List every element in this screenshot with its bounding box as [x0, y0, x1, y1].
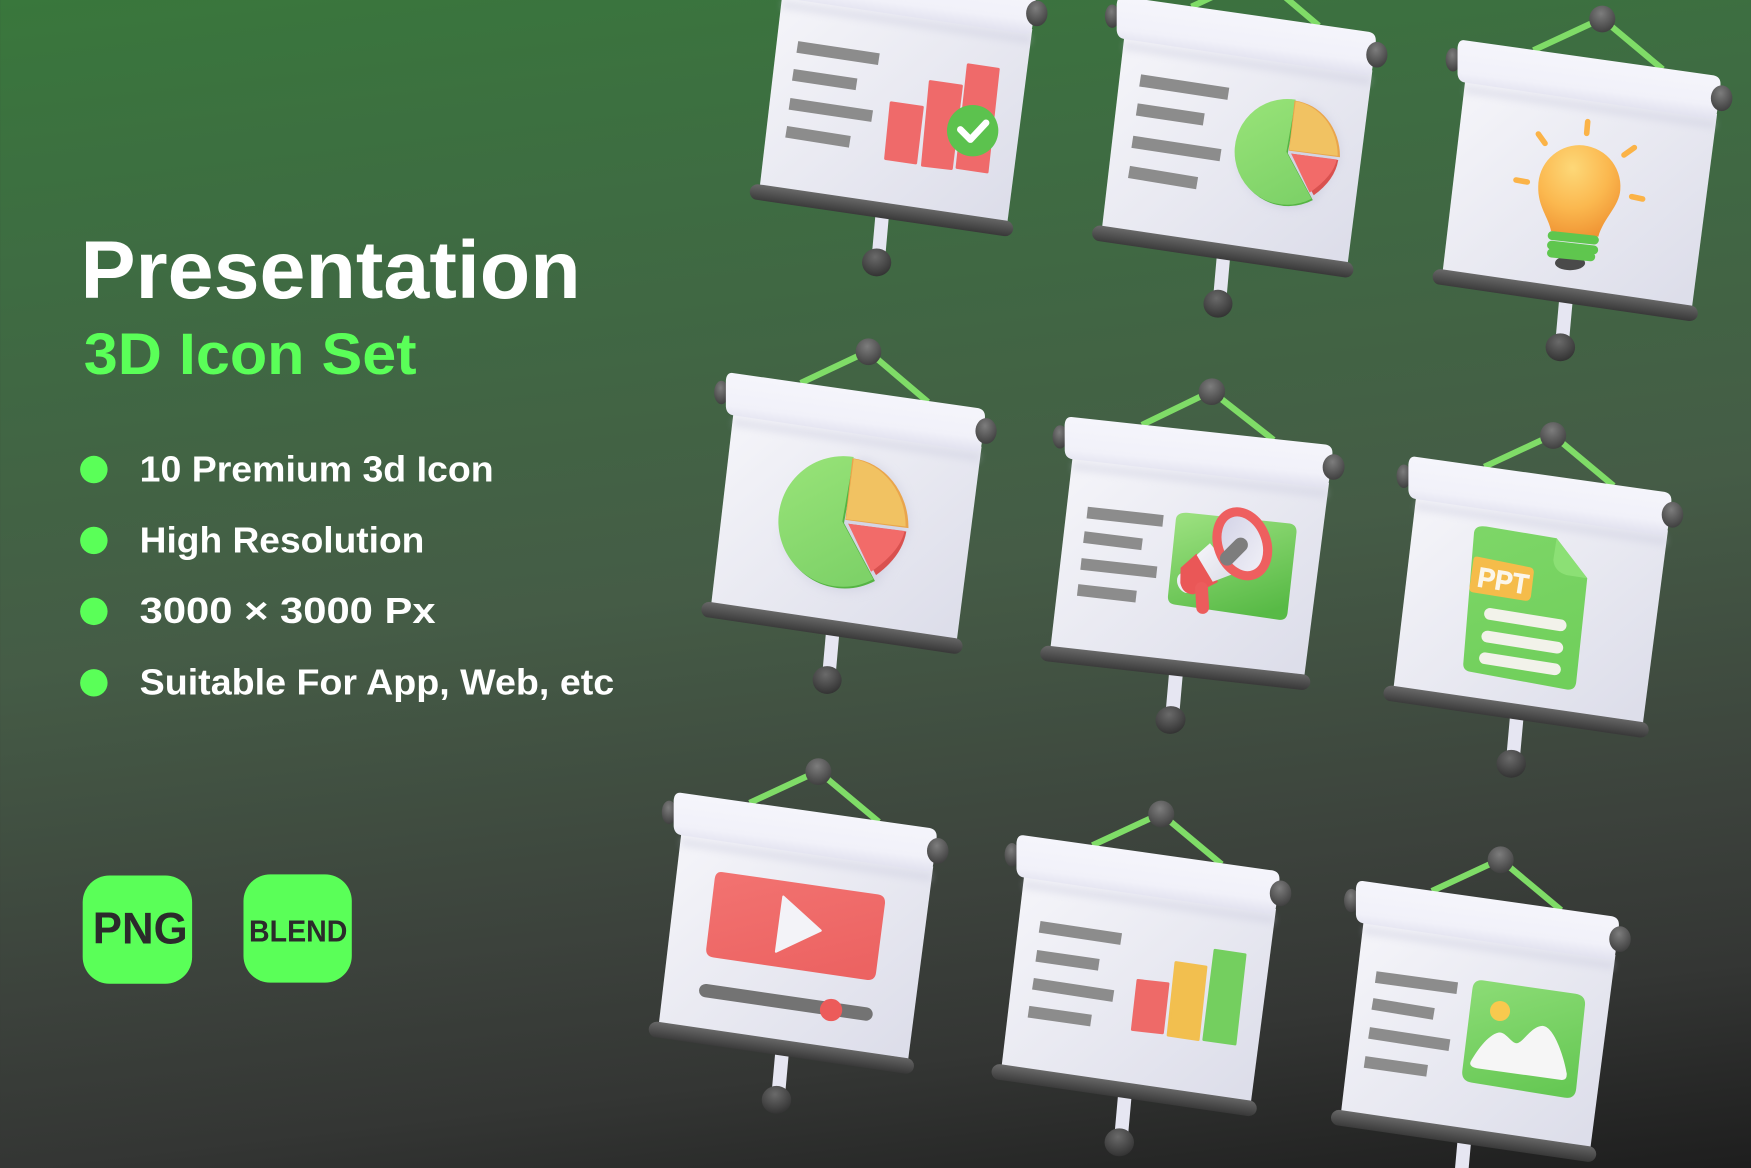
feature list — [80, 449, 614, 703]
badge: BLEND: BLEND — [249, 915, 347, 948]
icon: board with PPT document: PPT — [1475, 562, 1531, 600]
icon: board with light bulb — [1441, 6, 1732, 361]
bullet: dimensions: 3000 × 3000 Px — [140, 591, 436, 631]
icon: board with bar chart and check badge — [758, 0, 1048, 276]
bullet: high resolution: High Resolution — [140, 521, 424, 561]
bullet: suitable for: Suitable For App, Web, etc — [140, 663, 614, 703]
bullet: premium icons: 10 Premium 3d Icon — [140, 449, 494, 489]
icon: board with picture — [1339, 846, 1631, 1168]
icon: board with text lines and small pie chart — [1100, 0, 1387, 318]
icon: board with video player — [657, 758, 949, 1114]
icon: board with coloured bar chart — [999, 801, 1291, 1156]
badge: PNG: PNG — [93, 905, 188, 954]
badge: PNG — [83, 875, 192, 984]
icon: board with PPT document — [1391, 422, 1683, 778]
title: Presentation — [80, 225, 581, 316]
icon: board with megaphone — [1047, 374, 1346, 738]
badge: BLEND — [243, 874, 352, 983]
subtitle: 3D Icon Set — [84, 322, 417, 387]
icon: board with large pie chart — [709, 338, 997, 694]
